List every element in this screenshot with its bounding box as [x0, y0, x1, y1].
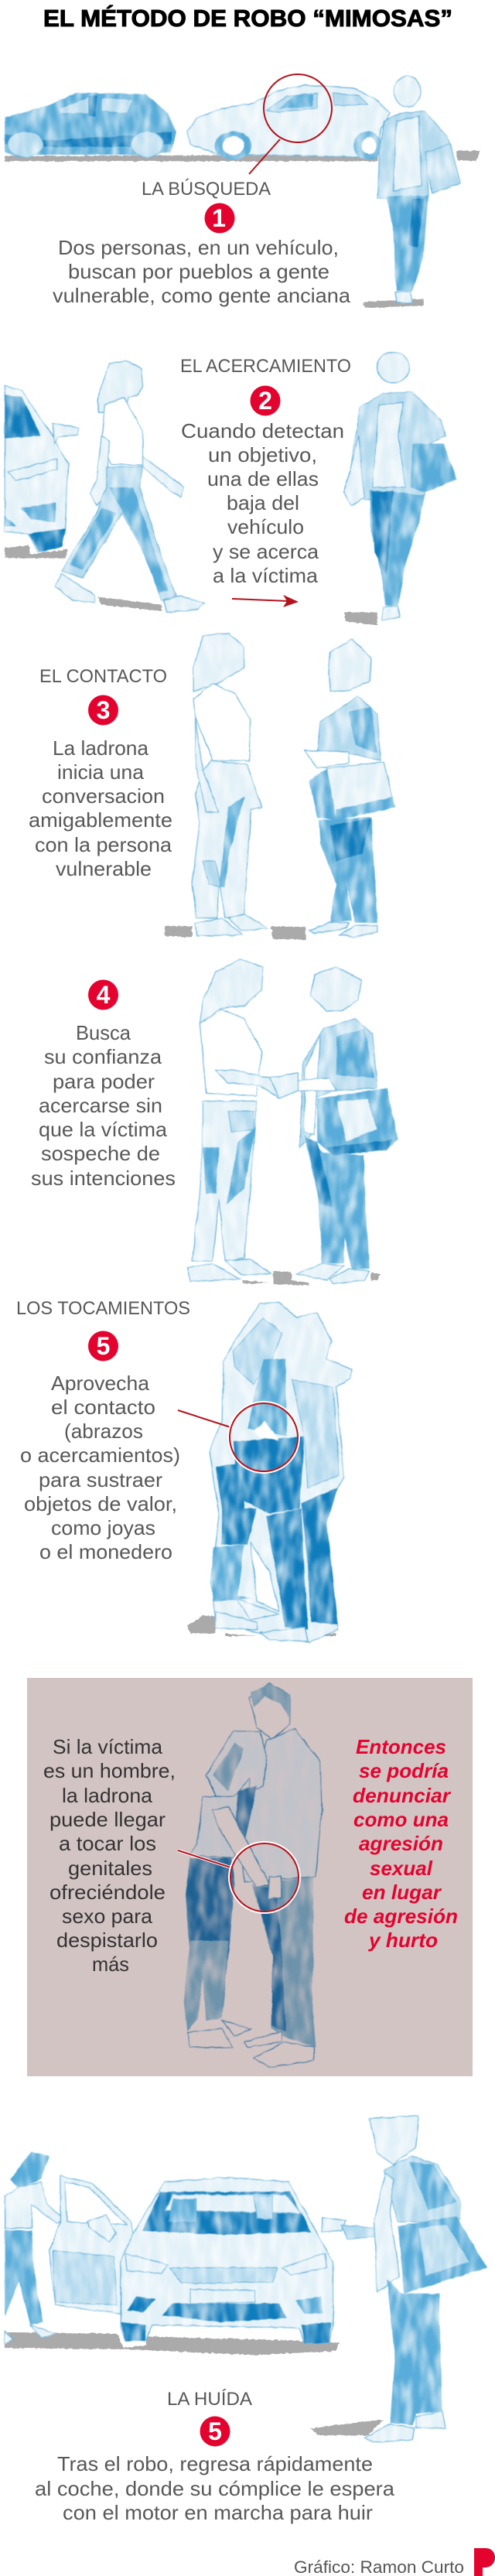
description: vulnerable: [56, 857, 152, 880]
description: para poder: [53, 1070, 155, 1093]
badge 2: [251, 385, 280, 416]
description: baja del: [227, 491, 299, 514]
text: legal note: se podría: [359, 1759, 449, 1782]
illustration: escape by car: [5, 2116, 486, 2442]
step 4: [31, 979, 176, 1190]
arrow: [232, 595, 299, 607]
description: [31, 1021, 176, 1190]
text: legal note: en lugar: [362, 1881, 442, 1904]
description: conversacion: [42, 784, 165, 808]
description: Dos personas, en un vehículo,: [58, 236, 339, 259]
text: legal note: [344, 1735, 458, 1952]
text: left description: ofreciéndole: [50, 1881, 166, 1904]
illustration: two cars and victim: [5, 76, 480, 308]
heading: LOS TOCAMIENTOS: [16, 1298, 190, 1319]
description: como joyas: [51, 1516, 155, 1539]
illustration: thief walking to victim: [5, 352, 456, 625]
description: Tras el robo, regresa rápidamente: [57, 2452, 373, 2475]
badge 5: [88, 1331, 118, 1361]
text: legal note: de agresión: [344, 1905, 458, 1928]
heading: LA BÚSQUEDA: [142, 179, 271, 200]
badge 2: 2: [258, 387, 272, 415]
text: left description: puede llegar: [50, 1808, 166, 1831]
badge 5: 5: [208, 2417, 222, 2445]
callout: circle and leader on car window: [249, 74, 332, 174]
step 5: los tocamientos: [16, 1298, 190, 1563]
text: legal note: sexual: [370, 1857, 433, 1880]
description: el contacto: [51, 1396, 155, 1419]
logo: [474, 2548, 495, 2576]
step 2: el acercamiento: [180, 356, 351, 607]
text: left description: Si la víctima: [53, 1735, 163, 1758]
description: objetos de valor,: [24, 1492, 177, 1515]
badge 4: 4: [97, 981, 111, 1009]
description: o acercamientos): [20, 1443, 180, 1467]
description: que la víctima: [39, 1118, 168, 1141]
step 1: la búsqueda: [53, 179, 351, 307]
description: con el motor en marcha para huir: [63, 2501, 373, 2524]
description: una de ellas: [207, 467, 319, 490]
badge 5: [200, 2417, 230, 2446]
text: left description: es un hombre,: [43, 1759, 176, 1782]
badge 1: [204, 203, 235, 234]
description: y se acerca: [213, 540, 319, 563]
description: vehículo: [227, 515, 304, 538]
text: legal note: denunciar: [353, 1784, 452, 1807]
heading: LA HUÍDA: [167, 2389, 252, 2410]
description: acercarse sin: [39, 1094, 162, 1117]
description: [29, 736, 172, 880]
callout: circle on hands: [178, 1843, 299, 1912]
description: su confianza: [44, 1045, 162, 1068]
panel: male victim: [27, 1678, 473, 2076]
description: Aprovecha: [51, 1372, 150, 1395]
text: left description: [43, 1735, 176, 1976]
step 3: el contacto: [29, 666, 172, 880]
description: un objetivo,: [208, 443, 317, 466]
text: left description: genitales: [68, 1857, 152, 1880]
text: left description: más: [92, 1952, 129, 1976]
description: (abrazos: [64, 1420, 143, 1443]
description: para sustraer: [39, 1468, 162, 1491]
step 5: la huída: [35, 2389, 395, 2524]
description: sus intenciones: [31, 1167, 176, 1190]
callout: circle on bag: [178, 1402, 299, 1472]
description: o el monedero: [39, 1540, 172, 1563]
illustration: man and thief: [184, 1683, 322, 2067]
text: left description: la ladrona: [62, 1784, 153, 1807]
text: left description: a tocar los: [59, 1832, 156, 1855]
description: [53, 236, 351, 307]
illustration: thief and victim talking: [164, 633, 394, 940]
description: La ladrona: [53, 736, 149, 760]
illustration: handshake: [187, 959, 398, 1286]
description: amigablemente: [29, 808, 172, 832]
badge 1: 1: [212, 204, 226, 232]
heading: EL CONTACTO: [39, 666, 167, 687]
illustration: hug: [187, 1302, 352, 1642]
description: inicia una: [57, 760, 145, 784]
badge 4: [88, 979, 118, 1010]
title: EL MÉTODO DE ROBO “MIMOSAS”: [43, 5, 452, 32]
text: legal note: como una: [353, 1808, 449, 1831]
description: a la víctima: [213, 564, 319, 587]
description: vulnerable, como gente anciana: [53, 284, 351, 307]
heading: EL ACERCAMIENTO: [180, 356, 351, 377]
text: legal note: Entonces: [356, 1735, 446, 1758]
text: legal note: agresión: [359, 1832, 443, 1855]
description: [181, 419, 344, 587]
description: [20, 1372, 180, 1563]
description: al coche, donde su cómplice le espera: [35, 2477, 395, 2500]
badge 5: 5: [97, 1332, 110, 1360]
text: left description: sexo para: [62, 1905, 153, 1928]
description: Cuando detectan: [181, 419, 344, 442]
description: Busca: [76, 1021, 131, 1044]
description: con la persona: [35, 833, 172, 856]
description: sospeche de: [41, 1142, 160, 1165]
badge 3: [88, 695, 118, 726]
text: legal note: y hurto: [367, 1929, 438, 1952]
description: [35, 2452, 395, 2524]
text: left description: despistarlo: [56, 1929, 158, 1952]
badge 3: 3: [97, 696, 110, 724]
description: buscan por pueblos a gente: [68, 260, 329, 283]
